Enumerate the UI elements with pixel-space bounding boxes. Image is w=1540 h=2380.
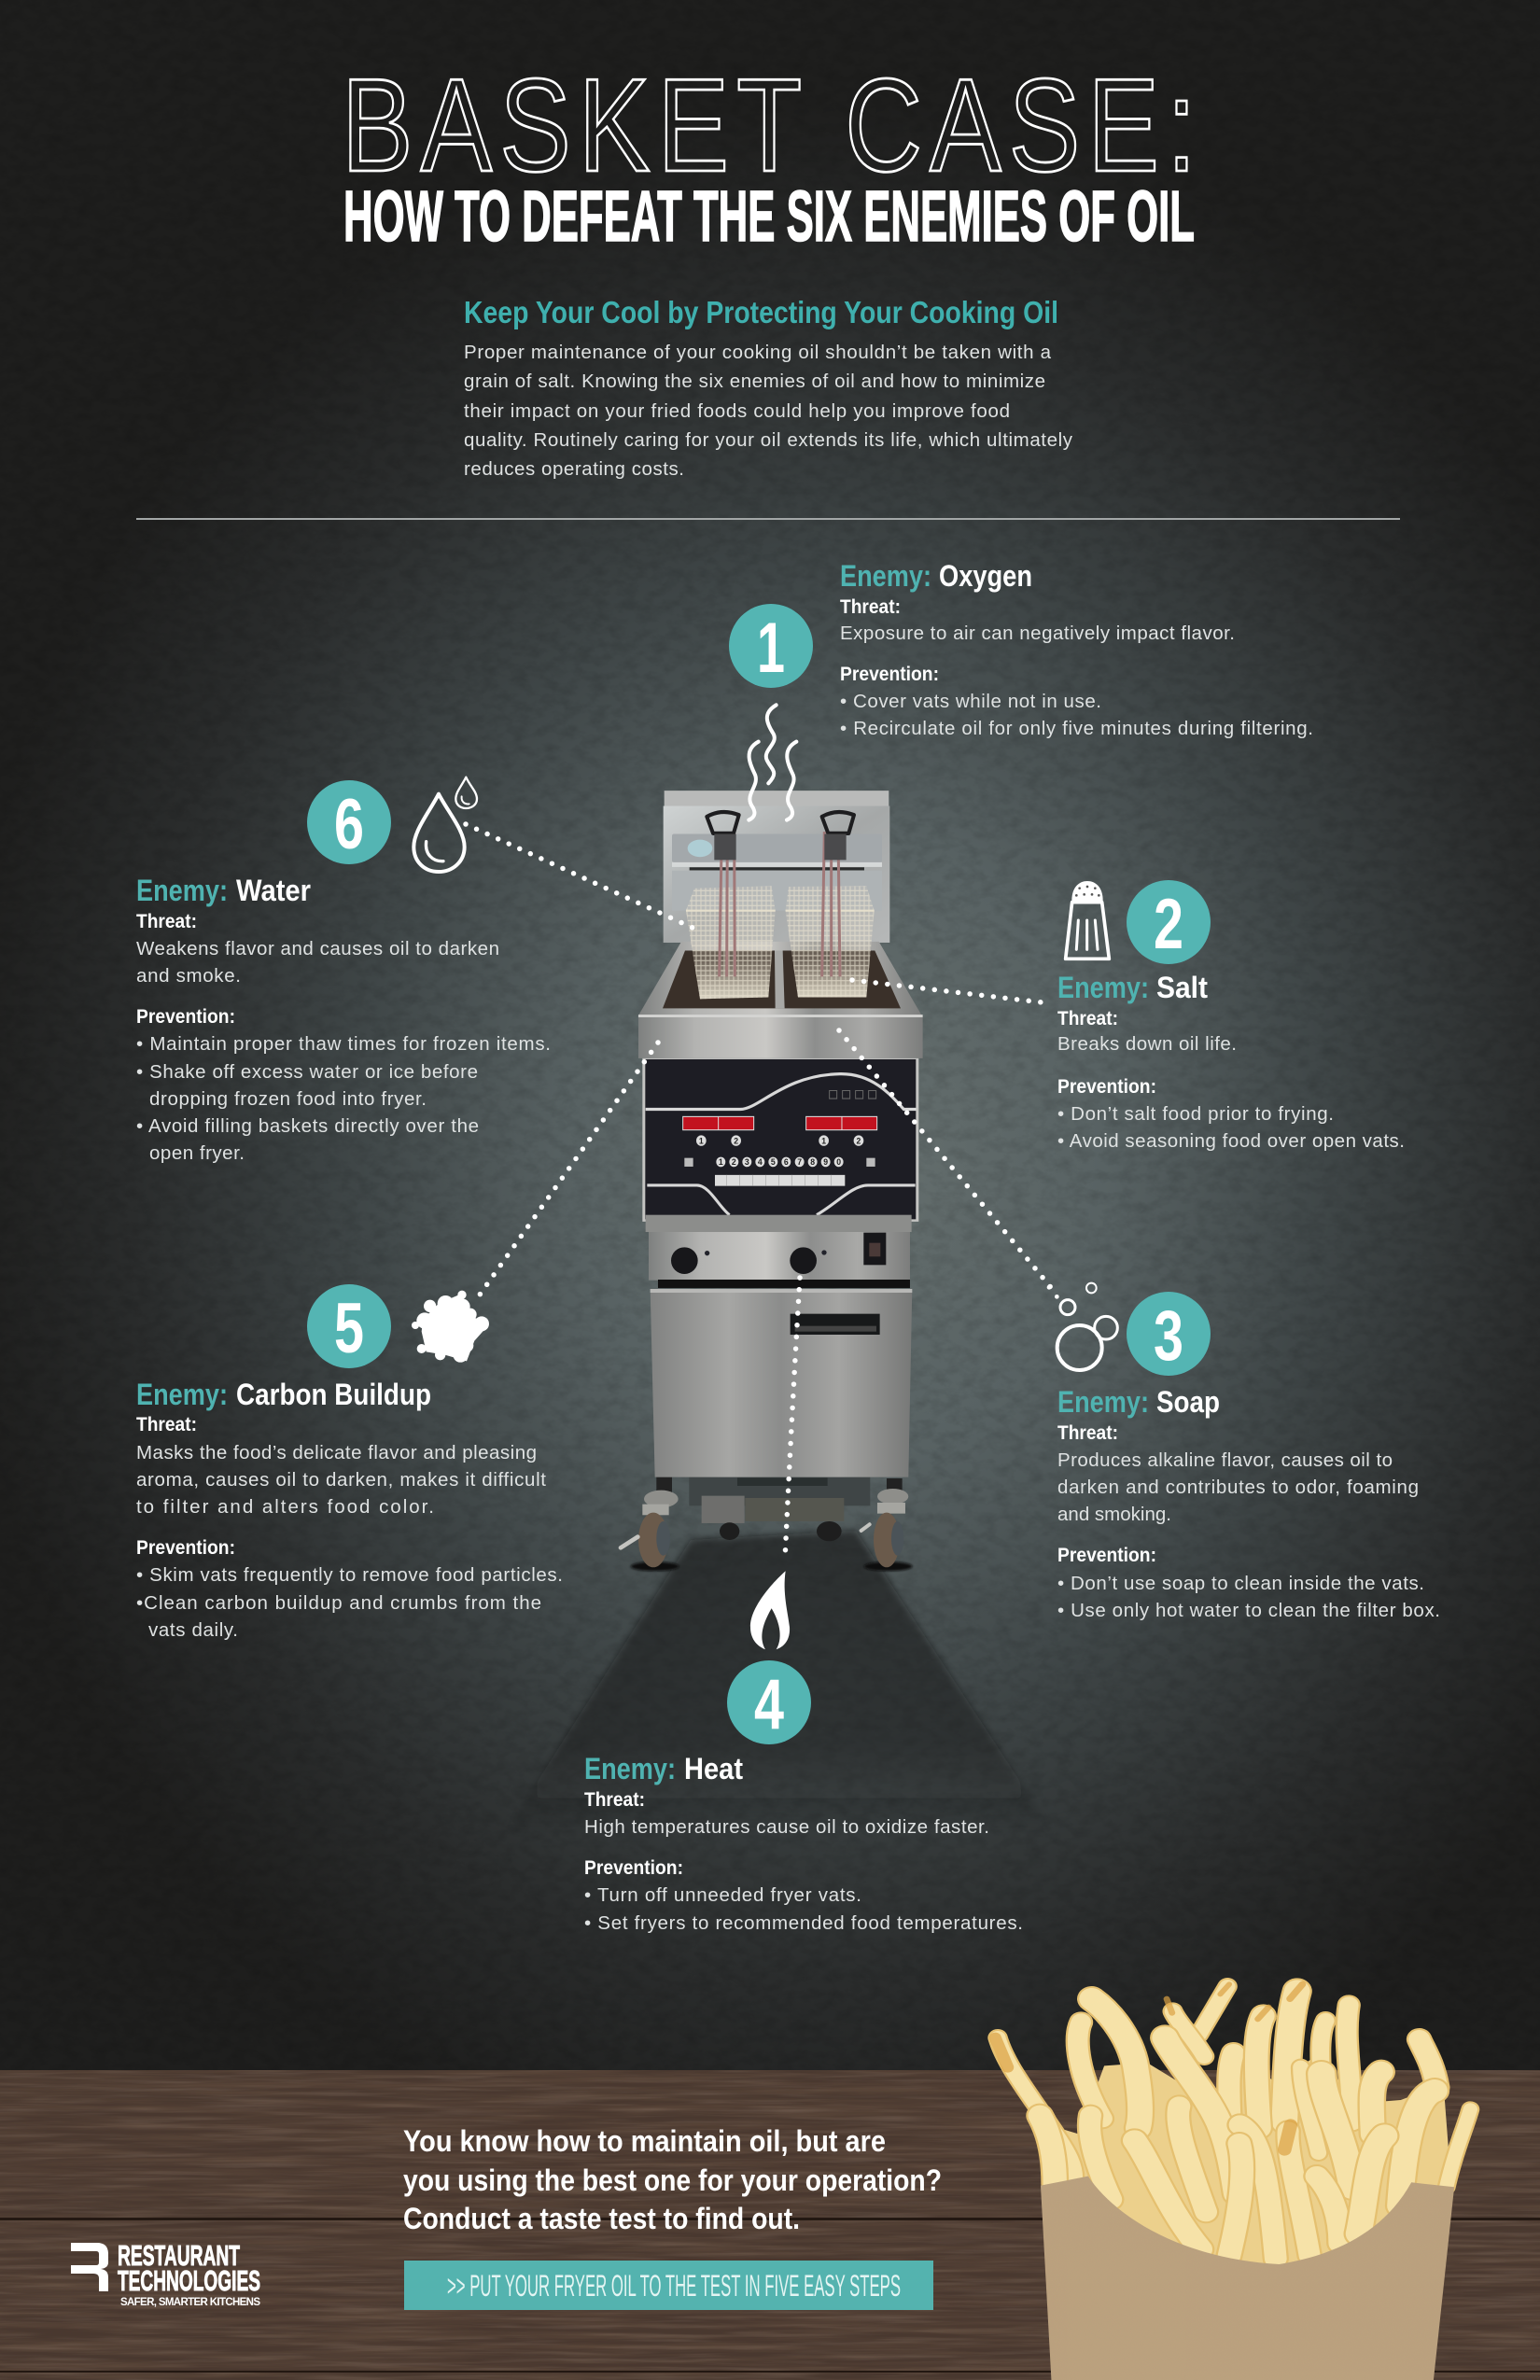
intro text block bbox=[464, 295, 1073, 480]
salt text: • Avoid seasoning food over open vats. bbox=[1057, 1130, 1405, 1152]
control panel: 9 bbox=[823, 1157, 828, 1167]
badge 5 bbox=[307, 1284, 391, 1368]
heading: oxygen: Oxygen bbox=[939, 559, 1032, 593]
intro paragraph bbox=[464, 342, 1073, 480]
control panel: 4 bbox=[758, 1157, 763, 1167]
logo wordmark: RESTAURANT bbox=[118, 2239, 240, 2272]
heading: heat: Heat bbox=[684, 1752, 743, 1785]
badge 1: 1 bbox=[757, 609, 785, 688]
badge 6: 6 bbox=[334, 785, 364, 864]
heat text bbox=[584, 1789, 1023, 1934]
carbon text: to filter and alters food color. bbox=[136, 1496, 434, 1518]
heading: oxygen bbox=[840, 559, 1032, 593]
basket right bbox=[786, 812, 875, 998]
background: wood table bbox=[0, 2070, 1540, 2380]
intro heading: Keep Your Cool by Protecting Your Cooking Oil bbox=[464, 295, 1058, 329]
heading: heat: Enemy: bbox=[584, 1752, 676, 1785]
logo wordmark: SAFER, SMARTER KITCHENS bbox=[120, 2297, 260, 2308]
call to action text: You know how to maintain oil, but are bbox=[403, 2124, 886, 2158]
intro paragraph: Proper maintenance of your cooking oil shouldn’t be taken with a bbox=[464, 342, 1052, 363]
water text: dropping frozen food into fryer. bbox=[149, 1088, 427, 1110]
intro paragraph: quality. Routinely caring for your oil extends its life, which ultimately bbox=[464, 429, 1073, 451]
oxygen text bbox=[840, 596, 1313, 739]
control panel: 2 bbox=[732, 1157, 736, 1167]
carbon text: vats daily. bbox=[148, 1619, 238, 1641]
enemy 6: water bbox=[136, 777, 551, 1164]
logo mark bbox=[71, 2243, 108, 2291]
badge 3 bbox=[1127, 1292, 1211, 1376]
heading: salt: Enemy: bbox=[1057, 971, 1149, 1004]
enemy 2: salt bbox=[1057, 880, 1405, 1152]
enemy 3: soap bbox=[1047, 1283, 1440, 1621]
connector: salt bbox=[852, 980, 1050, 1003]
control panel: 7 bbox=[797, 1157, 802, 1167]
water text: and smoke. bbox=[136, 965, 241, 987]
floor shadow of fryer bbox=[504, 1531, 1055, 1834]
badge 5: 5 bbox=[334, 1289, 364, 1368]
carbon text: Threat: bbox=[136, 1414, 197, 1435]
undercarriage bbox=[689, 1477, 870, 1505]
control panel: 5 bbox=[771, 1157, 776, 1167]
badge 1 bbox=[729, 604, 813, 688]
carbon text bbox=[136, 1414, 563, 1641]
badge 4: 4 bbox=[754, 1665, 784, 1744]
water text: open fryer. bbox=[149, 1142, 245, 1164]
salt text bbox=[1057, 1008, 1405, 1152]
basket left bbox=[686, 812, 776, 999]
intro paragraph: their impact on your fried foods could help you improve food bbox=[464, 400, 1010, 422]
soap text: darken and contributes to odor, foaming bbox=[1057, 1477, 1419, 1498]
carbon text: • Skim vats frequently to remove food particles. bbox=[136, 1564, 563, 1586]
badge 3: 3 bbox=[1154, 1296, 1183, 1376]
water text: Threat: bbox=[136, 911, 197, 932]
carbon text: Masks the food’s delicate flavor and pleasing bbox=[136, 1442, 537, 1463]
control panel: 2 bbox=[857, 1136, 861, 1145]
call to action text: you using the best one for your operation? bbox=[403, 2163, 942, 2197]
connector: heat bbox=[785, 1278, 800, 1560]
button bbox=[404, 2261, 933, 2310]
control panel: 2 bbox=[734, 1136, 738, 1145]
control panel: 1 bbox=[821, 1136, 826, 1145]
call to action text bbox=[403, 2124, 942, 2235]
heading: carbon buildup: Carbon Buildup bbox=[236, 1378, 431, 1411]
salt text: Breaks down oil life. bbox=[1057, 1033, 1237, 1055]
salt text: Threat: bbox=[1057, 1008, 1118, 1029]
carbon text: •Clean carbon buildup and crumbs from the bbox=[136, 1592, 541, 1614]
icon: carbon blob bbox=[412, 1291, 489, 1363]
call to action text: Conduct a taste test to find out. bbox=[403, 2202, 800, 2235]
water text: • Maintain proper thaw times for frozen items. bbox=[136, 1033, 551, 1055]
door handle bbox=[791, 1314, 880, 1335]
logo wordmark: TECHNOLOGIES bbox=[118, 2264, 260, 2297]
water text bbox=[136, 911, 551, 1164]
left caster bbox=[621, 1477, 679, 1567]
oxygen text: Threat: bbox=[840, 596, 901, 618]
salt text: • Don’t salt food prior to frying. bbox=[1057, 1103, 1334, 1125]
control panel: 1 bbox=[719, 1157, 723, 1167]
control panel: 8 bbox=[810, 1157, 815, 1167]
connector: soap bbox=[839, 1030, 1057, 1295]
control panel bbox=[642, 1058, 918, 1222]
icon: flame bbox=[750, 1571, 790, 1649]
heading: water bbox=[136, 874, 311, 907]
heading: oxygen: Enemy: bbox=[840, 559, 931, 593]
intro paragraph: reduces operating costs. bbox=[464, 458, 684, 480]
badge 4 bbox=[727, 1660, 811, 1744]
icon: bubbles bbox=[1047, 1283, 1117, 1370]
fries in carton bbox=[995, 1984, 1470, 2380]
logo: Restaurant Technologies bbox=[71, 2239, 260, 2308]
badge 6 bbox=[307, 780, 391, 864]
door bbox=[651, 1289, 912, 1477]
soap text bbox=[1057, 1422, 1440, 1621]
fryer illustration bbox=[621, 791, 923, 1571]
soap text: Threat: bbox=[1057, 1422, 1118, 1444]
heat text: Prevention: bbox=[584, 1857, 683, 1879]
water text: Weakens flavor and causes oil to darken bbox=[136, 938, 499, 959]
soap text: Produces alkaline flavor, causes oil to bbox=[1057, 1449, 1393, 1471]
heading: heat bbox=[584, 1752, 743, 1785]
icon: steam bbox=[749, 705, 796, 820]
connector: water bbox=[466, 824, 703, 932]
control panel: 6 bbox=[784, 1157, 789, 1167]
heading: soap: Enemy: bbox=[1057, 1385, 1149, 1419]
heat text: • Set fryers to recommended food temperatures. bbox=[584, 1912, 1023, 1934]
connector: carbon bbox=[478, 1043, 658, 1297]
water text: • Avoid filling baskets directly over the bbox=[136, 1115, 479, 1137]
enemy 5: carbon buildup bbox=[136, 1284, 563, 1641]
heading: water: Enemy: bbox=[136, 874, 228, 907]
intro paragraph: grain of salt. Knowing the six enemies of oil and how to minimize bbox=[464, 371, 1045, 392]
icon: water drops bbox=[413, 777, 477, 872]
badge 2 bbox=[1127, 880, 1211, 964]
wheel shadows bbox=[631, 1561, 679, 1571]
control panel: 1 bbox=[699, 1136, 704, 1145]
heading: carbon buildup bbox=[136, 1378, 431, 1411]
button: >> PUT YOUR FRYER OIL TO THE TEST IN FIVE EASY STEPS bbox=[447, 2269, 901, 2303]
oxygen text: Prevention: bbox=[840, 664, 939, 685]
salt text: Prevention: bbox=[1057, 1076, 1156, 1098]
heading: soap bbox=[1057, 1385, 1220, 1419]
front rim bbox=[638, 1016, 923, 1058]
logo wordmark bbox=[118, 2239, 260, 2308]
title line: Basket Case: BASKET CASE: bbox=[342, 51, 1204, 200]
control panel: 0 bbox=[836, 1157, 841, 1167]
icon: salt shaker bbox=[1066, 881, 1109, 959]
carbon text: aroma, causes oil to darken, makes it difficult bbox=[136, 1469, 546, 1491]
heading: salt: Salt bbox=[1156, 971, 1208, 1004]
fryer upper: backsplash, baskets, vats, control panel bbox=[637, 791, 923, 1222]
carbon text: Prevention: bbox=[136, 1537, 235, 1559]
right caster bbox=[861, 1478, 908, 1567]
soap text: and smoking. bbox=[1057, 1504, 1171, 1525]
water text: • Shake off excess water or ice before bbox=[136, 1061, 478, 1083]
title bbox=[342, 51, 1204, 257]
heading: soap: Soap bbox=[1156, 1385, 1220, 1419]
water text: Prevention: bbox=[136, 1006, 235, 1028]
enemy 4: heat bbox=[584, 1571, 1023, 1934]
enemy 1: oxygen bbox=[729, 559, 1313, 820]
heading: water: Water bbox=[236, 874, 311, 907]
oxygen text: • Recirculate oil for only five minutes during filtering. bbox=[840, 718, 1313, 739]
control panel: 3 bbox=[745, 1157, 749, 1167]
knob panel bbox=[649, 1232, 910, 1281]
heat text: High temperatures cause oil to oxidize faster. bbox=[584, 1816, 989, 1838]
badge 2: 2 bbox=[1154, 885, 1183, 964]
soap text: • Don’t use soap to clean inside the vats. bbox=[1057, 1573, 1424, 1594]
heat text: Threat: bbox=[584, 1789, 645, 1811]
oxygen text: • Cover vats while not in use. bbox=[840, 691, 1101, 712]
fryer vats bbox=[637, 942, 922, 1016]
soap text: Prevention: bbox=[1057, 1545, 1156, 1566]
heat text: • Turn off unneeded fryer vats. bbox=[584, 1884, 861, 1906]
fryer lower: knobs, door, wheels bbox=[621, 1215, 913, 1571]
soap text: • Use only hot water to clean the filter box. bbox=[1057, 1600, 1440, 1621]
heading: carbon buildup: Enemy: bbox=[136, 1378, 228, 1411]
fries bbox=[995, 1984, 1470, 2268]
oxygen text: Exposure to air can negatively impact flavor. bbox=[840, 623, 1235, 644]
paper carton bbox=[1033, 2172, 1462, 2380]
